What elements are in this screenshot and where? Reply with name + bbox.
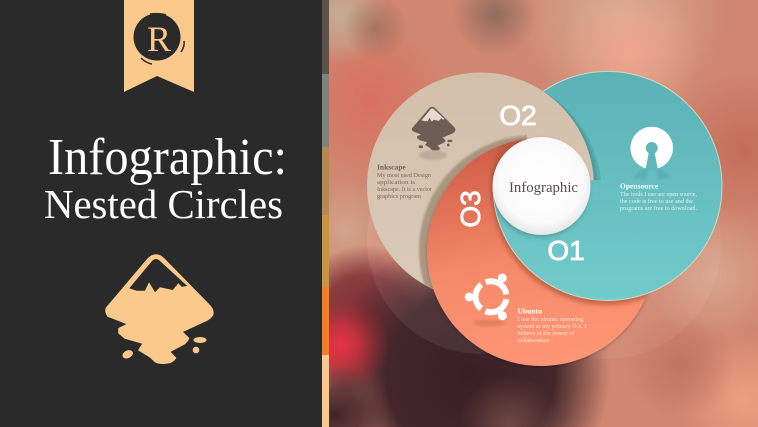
text: opensource: the code is free to use and the <box>620 198 693 205</box>
shadow: tan on teal <box>543 91 601 180</box>
banner with logo <box>124 0 194 92</box>
title: Infographic: <box>48 129 287 186</box>
text: inkscape: Inkscape. It is a vector <box>377 187 432 193</box>
text: ubuntu: I use the ubuntu operating <box>518 317 584 323</box>
text: inkscape: graphics program <box>377 194 421 200</box>
logo circle: R <box>147 19 171 59</box>
circle: tan 02 <box>367 72 594 300</box>
title <box>44 129 287 227</box>
number 01: O1 <box>547 235 585 266</box>
centre circle <box>492 137 590 235</box>
icon: inkscape small <box>412 107 455 160</box>
text: inkscape: application is <box>377 180 416 186</box>
number 03: O3 <box>455 190 486 228</box>
shadow: orange on tan <box>418 134 527 290</box>
text: inkscape: Inkscape <box>377 162 406 172</box>
text: opensource: The tools I use are open source, <box>620 192 698 198</box>
icon: ubuntu <box>465 274 509 326</box>
shadow: teal on orange <box>490 139 647 307</box>
ghost circles behind diagram <box>367 126 721 359</box>
text: ubuntu: collaboration <box>518 338 550 344</box>
shape: orange 03 <box>427 139 655 366</box>
text: inkscape <box>377 162 432 200</box>
centre label: Infographic <box>509 180 578 196</box>
title: Nested Circles <box>44 181 283 227</box>
blurred photo background <box>329 0 758 427</box>
text: ubuntu <box>518 306 586 344</box>
text: opensource: Opensource <box>620 182 659 190</box>
shape: teal 01 <box>493 71 722 300</box>
text: opensource <box>620 182 698 212</box>
icon: inkscape large <box>106 255 213 363</box>
text: ubuntu: Ubuntu <box>518 306 542 316</box>
left dark panel <box>0 0 322 427</box>
text: opensource: programs are free to download. <box>620 205 698 212</box>
text: ubuntu: system as my primary O.S. I <box>518 324 586 330</box>
text: ubuntu: believe in the power of <box>518 330 575 337</box>
text: inkscape: My most used Design <box>377 173 431 179</box>
panel: nested circles diagram <box>367 71 722 366</box>
number 02: O2 <box>499 100 537 131</box>
colour strip <box>322 0 329 427</box>
icon: open source <box>630 127 673 180</box>
teal rim <box>493 71 722 300</box>
